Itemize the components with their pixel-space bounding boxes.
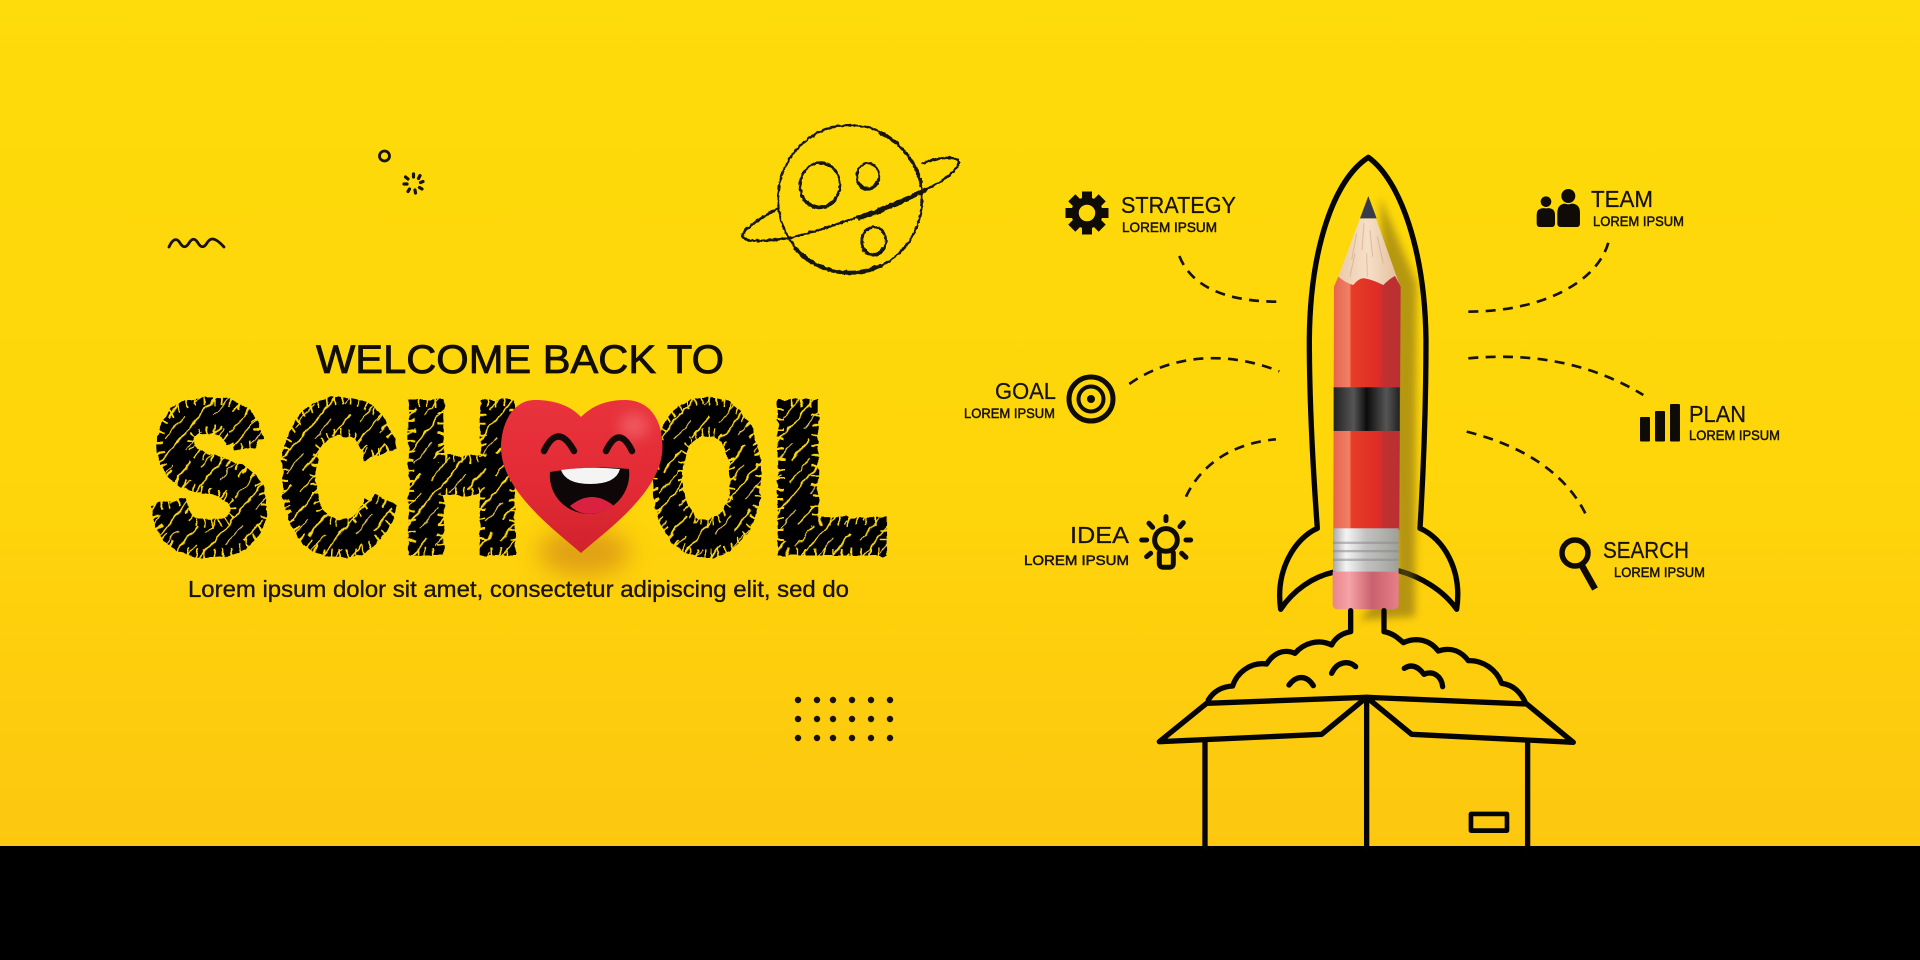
item: strategy: LOREM IPSUM xyxy=(1122,219,1217,235)
item: search xyxy=(1562,537,1705,589)
item: idea: LOREM IPSUM xyxy=(1024,552,1129,568)
icon: light bulb xyxy=(1142,517,1191,567)
cloud inner marks xyxy=(1289,663,1443,687)
icon: target xyxy=(1069,377,1113,421)
exhaust cloud and open box xyxy=(1159,611,1573,847)
icon: gear xyxy=(1066,192,1108,234)
item: search: LOREM IPSUM xyxy=(1614,564,1705,580)
exhaust and right cloud xyxy=(1384,611,1525,702)
heading: scribbled school: O xyxy=(652,363,762,592)
item: strategy: STRATEGY xyxy=(1121,192,1236,218)
left dashed connectors xyxy=(1129,256,1279,497)
item: plan: PLAN xyxy=(1689,401,1746,427)
item: search: SEARCH xyxy=(1603,537,1689,563)
pencil wood tip xyxy=(1334,218,1401,288)
icon: planet doodle xyxy=(743,125,959,273)
box sides xyxy=(1205,697,1528,847)
heading: scribbled school: H xyxy=(404,363,520,592)
box label xyxy=(1471,814,1507,831)
heading: scribbled school: C xyxy=(281,363,394,592)
icon: magnifier xyxy=(1562,540,1595,589)
decor: wave xyxy=(169,239,224,247)
item: idea xyxy=(1024,517,1191,568)
item: goal: LOREM IPSUM xyxy=(964,405,1055,421)
pencil eraser xyxy=(1333,572,1399,609)
decor: dot grid xyxy=(795,697,893,741)
item: team: TEAM xyxy=(1591,186,1653,212)
decor: sunburst xyxy=(404,174,423,193)
icon: smiling heart xyxy=(501,400,662,576)
icon: bar chart xyxy=(1640,404,1680,442)
decor: small ring xyxy=(380,151,390,161)
pencil xyxy=(1333,196,1417,620)
right dashed connectors xyxy=(1467,243,1643,520)
pencil body xyxy=(1333,276,1401,530)
item: plan xyxy=(1640,401,1780,443)
pencil ferrule xyxy=(1333,528,1399,572)
box flaps xyxy=(1159,697,1573,742)
text: subtitle: Lorem ipsum dolor sit amet, consectetur adipiscing elit, sed do xyxy=(188,576,849,602)
item: goal: GOAL xyxy=(995,378,1056,404)
item: idea: IDEA xyxy=(1070,522,1129,548)
heading: scribbled school: L xyxy=(772,363,886,592)
item: plan: LOREM IPSUM xyxy=(1689,427,1780,443)
heading: scribbled school xyxy=(153,363,886,592)
icon: people xyxy=(1537,188,1580,227)
heading: welcome back to: WELCOME BACK TO xyxy=(316,338,724,382)
item: strategy xyxy=(1066,192,1236,235)
rocket outline xyxy=(1280,157,1458,609)
pencil shadow xyxy=(1360,197,1417,620)
item: team xyxy=(1537,186,1684,229)
pencil black band xyxy=(1334,387,1400,431)
item: team: LOREM IPSUM xyxy=(1593,213,1684,229)
pencil lead xyxy=(1360,196,1377,218)
exhaust and left cloud xyxy=(1208,611,1351,700)
ground bar xyxy=(0,846,1920,960)
heading: scribbled school: S xyxy=(153,363,267,592)
item: goal xyxy=(964,377,1113,421)
